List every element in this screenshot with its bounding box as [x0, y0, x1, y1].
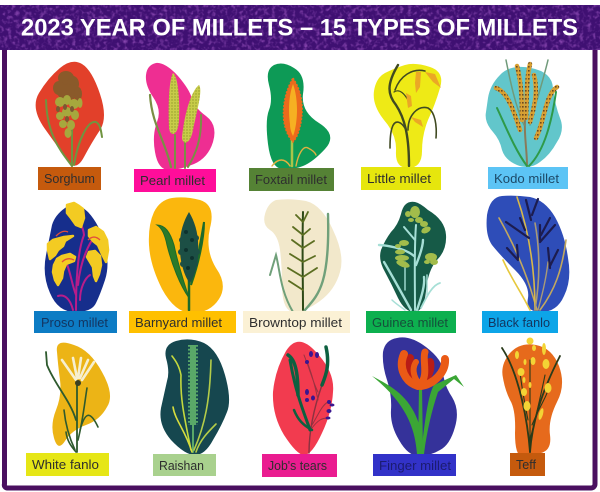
label: job's tears: Job's tears	[268, 458, 327, 473]
label: pearl millet: Pearl millet	[140, 173, 205, 188]
panel: little millet	[361, 64, 441, 190]
label: proso millet: Proso millet	[41, 315, 108, 330]
label: black fanlo: Black fanlo	[488, 315, 550, 330]
label: sorghum: Sorghum	[44, 171, 95, 186]
panel: black fanlo	[482, 196, 569, 333]
panel: raishan	[153, 339, 229, 476]
panel: proso millet	[34, 203, 117, 333]
panel: sorghum	[36, 62, 104, 190]
label: teff: Teff	[516, 457, 536, 472]
label: browntop millet: Browntop millet	[249, 315, 342, 330]
panel: finger millet	[372, 337, 464, 476]
label: guinea millet: Guinea millet	[372, 315, 448, 330]
panel: pearl millet	[134, 63, 216, 192]
panel: kodo millet	[486, 60, 568, 189]
label: barnyard millet: Barnyard millet	[135, 315, 222, 330]
panel: job's tears	[262, 342, 337, 477]
label: kodo millet: Kodo millet	[494, 171, 559, 186]
title: 2023 YEAR OF MILLETS – 15 TYPES OF MILLETS	[21, 14, 578, 42]
panel: white fanlo	[26, 343, 110, 476]
header banner	[0, 5, 600, 50]
panel: foxtail millet	[249, 64, 334, 191]
label: white fanlo: White fanlo	[32, 457, 99, 472]
panel: guinea millet	[366, 202, 456, 333]
panel: teff	[502, 338, 562, 476]
label: raishan: Raishan	[159, 458, 204, 473]
panel: browntop millet	[243, 199, 350, 333]
label: finger millet: Finger millet	[379, 458, 451, 473]
label: foxtail millet: Foxtail millet	[255, 172, 327, 187]
panel: barnyard millet	[129, 197, 236, 333]
label: little millet: Little millet	[367, 171, 431, 186]
